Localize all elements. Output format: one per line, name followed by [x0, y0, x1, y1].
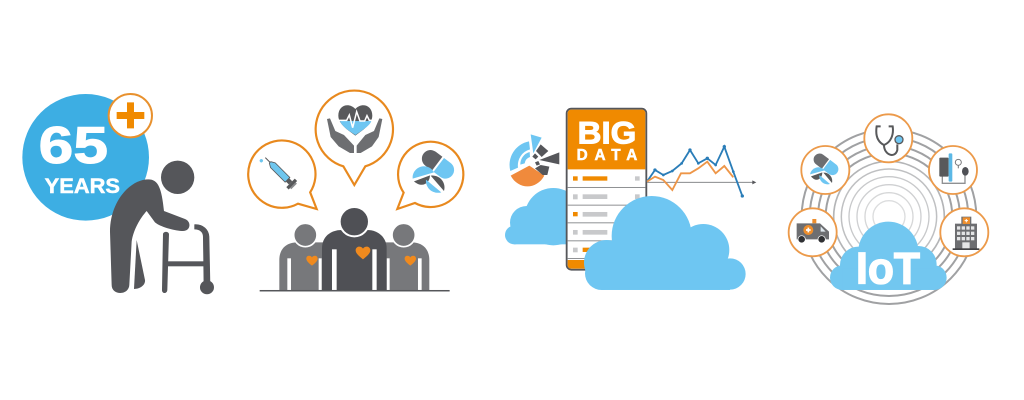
icon: pills: [801, 146, 849, 194]
IoT cloud: [830, 222, 947, 293]
concentric signal rings: [802, 129, 976, 304]
speech bubble: syringe: [248, 140, 317, 209]
panel: ageing population: [22, 94, 214, 294]
IoT cloud: IoT: [856, 244, 920, 293]
icon: front cloud: [584, 196, 746, 290]
person: right: [384, 223, 429, 290]
panel: big data: [505, 109, 756, 290]
person: left: [279, 223, 325, 290]
icon: caring hands: [327, 118, 382, 153]
icon: radial pie chart: [510, 134, 559, 186]
speech bubble: heart in hands: [316, 91, 393, 185]
card title: BIG: [578, 115, 636, 150]
database card: [567, 109, 646, 270]
icon: orange plus: [109, 94, 152, 137]
data rows: [568, 176, 646, 259]
line chart: [647, 145, 756, 198]
icon: blood pressure monitor: [929, 146, 977, 194]
icon: pills: [413, 147, 458, 193]
icon: heart with pulse: [338, 105, 373, 136]
panel: patients and care: [248, 91, 463, 291]
panel: internet of things: [789, 114, 988, 304]
icon: stethoscope: [864, 114, 912, 162]
icon: hospital: [940, 208, 988, 256]
icon: ambulance: [789, 208, 837, 256]
65 years badge: [22, 94, 149, 221]
ground line: [260, 290, 450, 291]
card title: DATA: [577, 147, 637, 164]
icon: back cloud: [505, 188, 582, 245]
65 years badge: YEARS: [45, 174, 120, 198]
person: centre: [322, 207, 387, 290]
speech bubble: pills: [397, 142, 463, 209]
icon: elderly person with walker: [110, 161, 214, 294]
65 years badge: 65: [39, 117, 108, 175]
icon: syringe: [259, 152, 298, 191]
card title: [577, 115, 637, 164]
group of three people: [260, 207, 450, 291]
